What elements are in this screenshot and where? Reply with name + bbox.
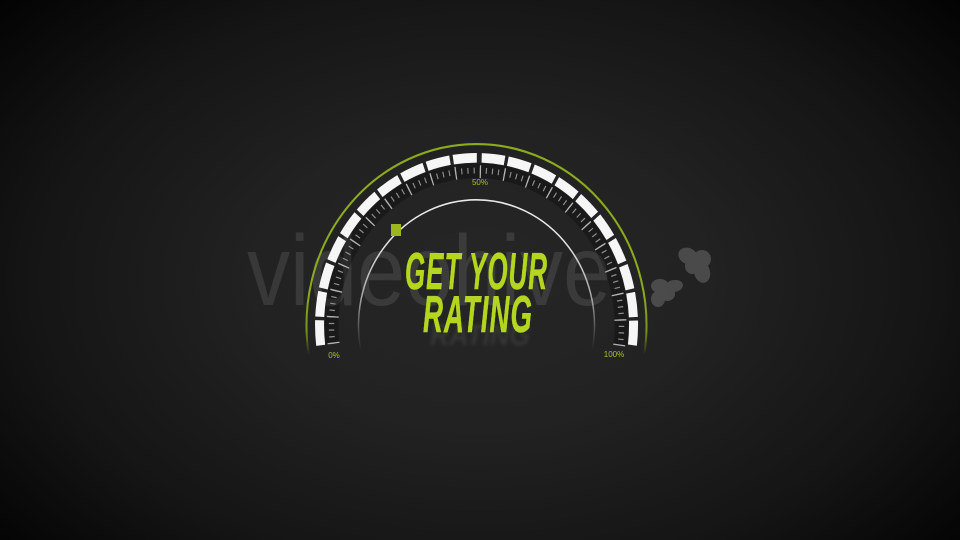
major ticks [333,172,625,346]
outer green arc [306,144,646,355]
watermark wordmark: videohive [247,215,611,327]
watermark logo [651,245,713,307]
title [405,243,548,344]
text: GET YOUR [405,243,548,301]
label 50%: 50% [472,178,488,187]
logo upper blob [676,245,713,285]
label 0%: 0% [328,351,340,360]
white gauge segments [320,158,634,347]
minor ticks [332,171,622,344]
gauge [306,144,646,355]
tick track shadow [332,171,622,345]
small green marker [391,224,401,236]
logo lower blob [651,279,684,307]
faded headline reflection: RATING [430,319,530,352]
label 100%: 100% [604,350,624,359]
inner white arc [358,200,594,353]
title line 2: RATING [423,286,533,344]
